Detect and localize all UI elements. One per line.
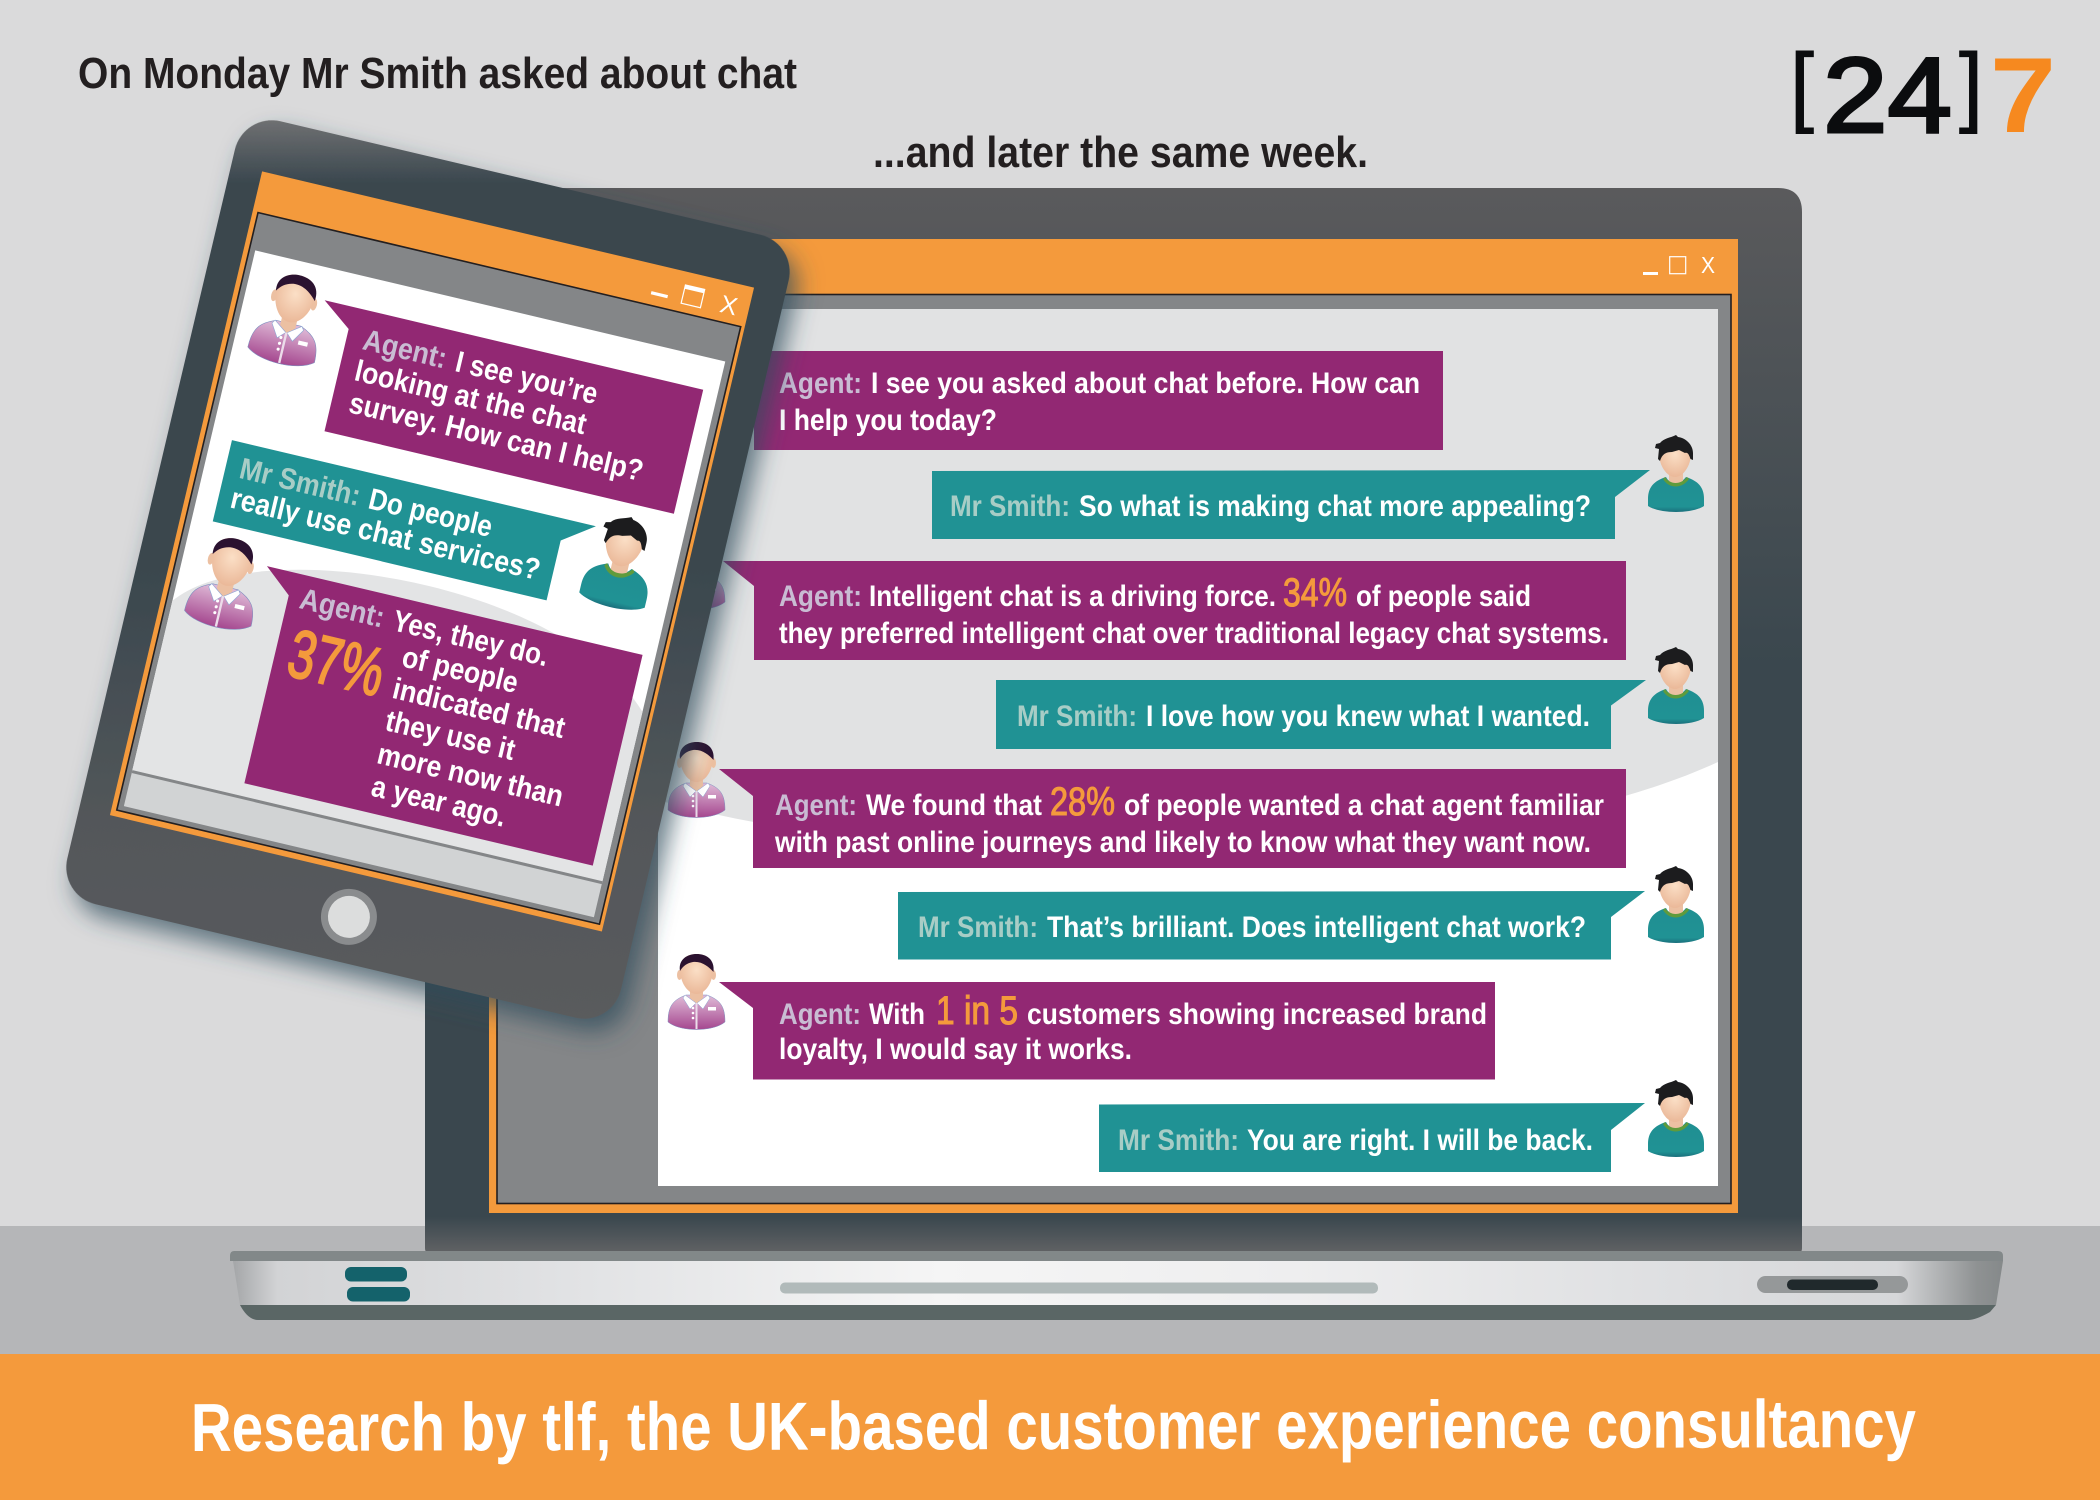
tablet mr smith message: Mr Smith: (236, 452, 364, 513)
desk (0, 1226, 2100, 1354)
agent message 2: 34% (1283, 571, 1347, 615)
tablet agent avatar 1 (246, 268, 333, 371)
tablet agent message 2: Agent: (297, 583, 388, 634)
tablet body (59, 113, 797, 1026)
agent message 1: I see you asked about chat before. How can (871, 367, 1420, 400)
logo: [24]7 (1790, 35, 2056, 155)
mr smith message 1 (932, 470, 1650, 539)
mr smith message 2: Mr Smith: (1017, 700, 1137, 733)
tablet agent message 1 (295, 300, 703, 514)
heading: later the same week: ...and later the same week. (873, 128, 1368, 177)
agent message 2: Intelligent chat is a driving force. (869, 580, 1276, 613)
agent message 2: of people said (1356, 580, 1531, 613)
mr smith avatar 4 (1648, 1080, 1704, 1157)
tablet agent message 2: more now than (374, 738, 566, 813)
agent message 4: customers showing increased brand (1027, 998, 1487, 1031)
tablet mr smith message: Do people (365, 483, 496, 544)
mr smith message 1: So what is making chat more appealing? (1079, 490, 1591, 523)
mr smith message 2 (996, 680, 1646, 749)
tablet agent message 1: I see you’re (452, 346, 601, 411)
laptop base (230, 1251, 2003, 1320)
agent avatar 1 (668, 534, 725, 610)
tablet agent message 2: Yes, they do. (389, 605, 552, 673)
tablet agent message 2: indicated that (389, 672, 568, 745)
agent message 4: With (869, 998, 925, 1031)
mr smith message 1: Mr Smith: (950, 490, 1070, 523)
tablet mr smith message (213, 440, 596, 607)
agent message 1: I help you today? (779, 404, 997, 437)
agent message 2 (723, 561, 1626, 660)
mr smith avatar 2 (1648, 647, 1704, 724)
tablet agent message 1: Agent: (360, 324, 450, 375)
agent message 4: loyalty, I would say it works. (779, 1033, 1132, 1066)
footer band (0, 1354, 2100, 1500)
tablet (59, 113, 797, 1026)
tablet window controls: X (717, 290, 740, 321)
agent message 3: Agent: (775, 789, 857, 822)
tablet agent message 1: looking at the chat (351, 355, 590, 441)
agent message 1: Agent: (779, 367, 862, 400)
agent message 3: We found that (866, 789, 1042, 822)
tablet agent message 1: survey. How can I help? (346, 387, 646, 488)
agent message 3: 28% (1050, 780, 1115, 824)
tablet screen (110, 171, 754, 931)
mr smith message 3: That’s brilliant. Does intelligent chat work? (1047, 911, 1586, 944)
mr smith avatar 1 (1648, 435, 1704, 512)
agent message 3: with past online journeys and likely to know what they want now. (774, 826, 1591, 859)
agent message 2: they preferred intelligent chat over traditional legacy chat systems. (779, 617, 1609, 650)
logo: [24]7: ] (1959, 35, 1983, 134)
tablet window controls (649, 274, 740, 321)
mr smith message 2: I love how you knew what I wanted. (1146, 700, 1590, 733)
mr smith message 4 (1099, 1103, 1645, 1172)
tablet agent message 2 (217, 566, 643, 866)
tablet home button (315, 883, 383, 951)
agent avatar 2 (668, 742, 725, 818)
tablet mr smith message: really use chat services? (227, 482, 543, 587)
logo: [24]7: 7 (1990, 35, 2056, 155)
mr smith avatar 3 (1648, 866, 1704, 943)
mr smith message 3: Mr Smith: (918, 911, 1038, 944)
tablet agent message 2: of people (399, 641, 521, 700)
agent message 4: 1 in 5 (936, 989, 1018, 1033)
agent message 4: Agent: (779, 998, 861, 1031)
tablet agent message 2: a year ago. (368, 770, 509, 834)
window controls: X (1701, 252, 1715, 278)
tablet agent message 2: 37% (281, 615, 392, 711)
window controls (1643, 252, 1715, 278)
tablet mr smith avatar (578, 509, 664, 615)
laptop chat window (489, 239, 1738, 1213)
agent message 3: of people wanted a chat agent familiar (1124, 789, 1604, 822)
agent message 3 (719, 769, 1626, 868)
logo: [24]7: [ (1790, 35, 1814, 134)
logo: [24]7: 24 (1823, 35, 1952, 155)
agent message 1 (754, 351, 1443, 450)
agent avatar 3 (668, 954, 725, 1030)
agent message 2: Agent: (779, 580, 862, 613)
laptop lid (425, 188, 1802, 1254)
mr smith message 4: Mr Smith: (1118, 1124, 1239, 1157)
laptop (230, 188, 2003, 1320)
heading: on monday: On Monday Mr Smith asked about chat (78, 49, 797, 98)
tablet agent message 2: they use it (382, 705, 518, 767)
agent message 4 (719, 982, 1495, 1080)
mr smith message 3 (898, 891, 1645, 960)
mr smith message 4: You are right. I will be back. (1247, 1124, 1593, 1157)
tablet agent avatar 2 (182, 531, 270, 635)
